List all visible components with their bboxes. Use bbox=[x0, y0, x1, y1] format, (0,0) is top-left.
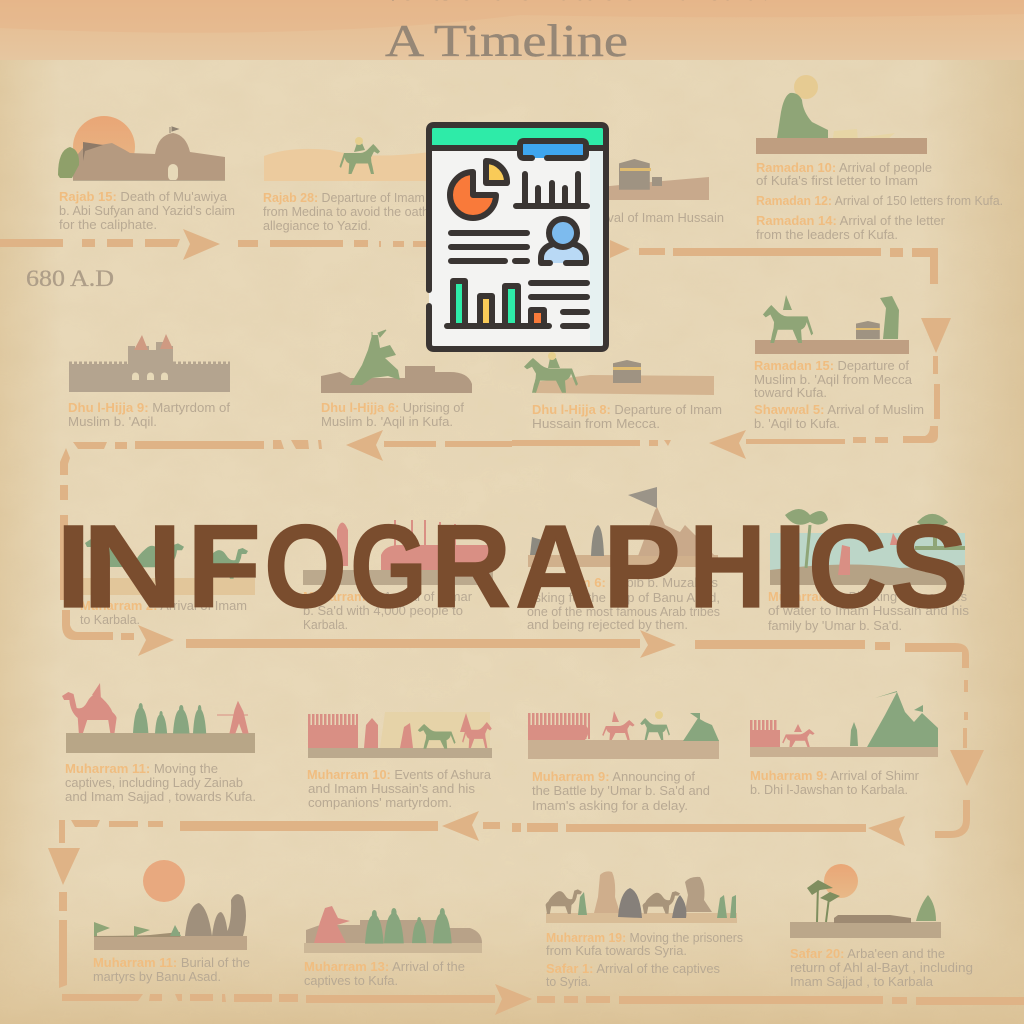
scene: Muharram 6 bbox=[528, 487, 718, 567]
text: Safar 20: Imam Sajjad , to Karbala bbox=[790, 975, 933, 989]
main heading: N bbox=[82, 501, 183, 633]
scene: Muharram 9 Shimr bbox=[750, 691, 938, 757]
scene: Mecca arrival bbox=[600, 159, 709, 200]
scene: Dhu l-Hijja 9 bbox=[69, 334, 230, 392]
scene: Ramadan 10 bbox=[756, 75, 927, 154]
text: Muharram 7: family by 'Umar b. Sa'd. bbox=[768, 619, 902, 633]
text: Dhu l-Hijja 6: Dhu l-Hijja 6: Uprising of bbox=[321, 401, 465, 415]
main heading: I bbox=[773, 501, 807, 633]
text: Dhu l-Hijja 8: Dhu l-Hijja 8: Departure of Imam bbox=[532, 403, 722, 417]
text: Ramadan 15: Muslim b. 'Aqil from Mecca bbox=[754, 373, 912, 387]
text: Rajab 15: b. Abi Sufyan and Yazid's claim bbox=[59, 204, 235, 218]
text: Dhu l-Hijja 9: Muslim b. 'Aqil. bbox=[68, 415, 157, 429]
text: Rajab 28: Rajab 28: Departure of Imam Hussain bbox=[263, 191, 473, 205]
text: Muharram 10: and Imam Hussain's and his bbox=[308, 782, 475, 796]
main heading: G bbox=[350, 501, 427, 633]
icon part: text lines left bbox=[451, 233, 527, 261]
text: Rajab 28: from Medina to avoid the oath of bbox=[263, 205, 444, 219]
scene: Muharram 7 bbox=[770, 509, 965, 585]
main heading: O bbox=[264, 501, 347, 633]
text: Muharram 2: to Karbala. bbox=[80, 613, 140, 627]
text: Ramadan 10: Ramadan 12: Arrival of 150 letters from Kufa. bbox=[756, 194, 1003, 208]
scene: Rajab 28 bbox=[264, 137, 430, 181]
text: Ramadan 15: Shawwal 5: Arrival of Muslim bbox=[754, 403, 924, 417]
text: Dhu l-Hijja 6 bbox=[321, 401, 465, 429]
text: Safar 20: return of Ahl al-Bayt , including bbox=[790, 961, 973, 975]
main heading: R bbox=[431, 501, 511, 633]
text: Ramadan 10: Ramadan 10: Arrival of people bbox=[756, 161, 932, 175]
scene: Muharram 19 bbox=[546, 871, 737, 923]
scene: Muharram 10 bbox=[308, 712, 492, 758]
text: Muharram 19: Safar 1: Arrival of the captives bbox=[546, 962, 720, 976]
text: Rajab 28 bbox=[263, 191, 473, 233]
text: Muharram 3 bbox=[303, 590, 472, 632]
scene: Muharram 11 captives bbox=[62, 683, 255, 753]
text: Dhu l-Hijja 8 bbox=[532, 403, 722, 431]
scene: Muharram 2 bbox=[80, 539, 255, 595]
text: Muharram 11 captives: Muharram 11: Moving the bbox=[65, 762, 218, 776]
text: Muharram 13 bbox=[304, 960, 465, 988]
text: Mecca arrival: Sha'ban 3: Arrival of Imam Hussain bbox=[520, 211, 724, 225]
text: Muharram 7: Muharram 7: Blocking the sources bbox=[768, 590, 967, 604]
text: Ramadan 10: of Kufa's first letter to Imam bbox=[756, 174, 918, 188]
text: Ramadan 15: Ramadan 15: Departure of bbox=[754, 359, 910, 373]
text: Rajab 15 bbox=[59, 190, 235, 232]
text: Muharram 6: one of the most famous Arab tribes bbox=[527, 605, 720, 619]
icon part: sheet outline bbox=[429, 125, 606, 349]
text: Muharram 9 Shimr bbox=[750, 769, 919, 797]
scene: Dhu l-Hijja 8 bbox=[524, 352, 714, 395]
year label: 680 A.D bbox=[26, 266, 114, 291]
text: Muharram 19: to Syria. bbox=[546, 975, 591, 989]
text: Muharram 10: companions' martyrdom. bbox=[308, 796, 452, 810]
text: Muharram 7: of water to Imam Hussain and his bbox=[768, 604, 969, 618]
text: Ramadan 15: b. 'Aqil to Kufa. bbox=[754, 417, 840, 431]
text: Muharram 9 announcing: Imam's asking for a delay. bbox=[532, 799, 688, 813]
main heading: C bbox=[808, 501, 887, 633]
text: Muharram 6: Muharram 6: Habib b. Muzahir's bbox=[527, 576, 718, 590]
scene: Muharram 11 burial bbox=[94, 860, 247, 950]
text: Safar 20: Safar 20: Arba'een and the bbox=[790, 947, 945, 961]
text: Muharram 9 Shimr: Muharram 9: Arrival of Shimr bbox=[750, 769, 919, 783]
text: Muharram 10: Muharram 10: Events of Ashura bbox=[307, 768, 491, 782]
text: Muharram 19 bbox=[546, 931, 743, 989]
title bbox=[366, 0, 770, 66]
main heading: F bbox=[187, 501, 261, 633]
text: Muharram 11 captives bbox=[65, 762, 256, 804]
text: Ramadan 10 bbox=[756, 161, 1003, 242]
icon part: blue tab bbox=[520, 141, 586, 158]
text: Muharram 6: asking for the help of Banu Asad, bbox=[527, 591, 720, 605]
text: Muharram 9 announcing: Muharram 9: Announcing of bbox=[532, 770, 696, 784]
text: Ramadan 10: from the leaders of Kufa. bbox=[756, 228, 898, 242]
main heading: A bbox=[515, 501, 596, 633]
text: Muharram 6: and being rejected by them. bbox=[527, 618, 688, 632]
text: Muharram 11 captives: captives, including Lady Zainab bbox=[65, 776, 243, 790]
title: A Timeline bbox=[385, 15, 628, 66]
text: Muharram 13: captives to Kufa. bbox=[304, 974, 398, 988]
text: Muharram 13: Muharram 13: Arrival of the bbox=[304, 960, 465, 974]
main heading: P bbox=[603, 501, 681, 633]
top torn band bbox=[0, 0, 1024, 60]
text: Muharram 7 bbox=[768, 590, 969, 633]
scene: Muharram 3 bbox=[303, 520, 493, 585]
icon part: text lines right bbox=[531, 283, 587, 326]
icon part: top bar chart bbox=[516, 174, 587, 206]
main heading bbox=[56, 501, 968, 633]
text: Muharram 10 bbox=[307, 768, 491, 810]
icon part: bottom bar chart bbox=[447, 281, 549, 326]
scene: Ramadan 15 bbox=[755, 295, 909, 354]
icon part: person bbox=[541, 219, 586, 263]
text: Ramadan 10: Ramadan 14: Arrival of the letter bbox=[756, 214, 945, 228]
text: Muharram 11 burial: Muharram 11: Burial of the bbox=[93, 956, 250, 970]
main heading: I bbox=[56, 501, 91, 633]
text: Rajab 15: for the caliphate. bbox=[59, 218, 157, 232]
text: Muharram 3: Karbala. bbox=[303, 618, 348, 632]
text: Muharram 3: b. Sa'd with 4,000 people to bbox=[303, 604, 463, 618]
main heading: H bbox=[689, 501, 766, 633]
text: Muharram 9 Shimr: b. Dhi l-Jawshan to Karbala. bbox=[750, 783, 908, 797]
scene: Rajab 15 bbox=[58, 116, 225, 181]
text: Dhu l-Hijja 8: Hussain from Mecca. bbox=[532, 417, 660, 431]
text: Muharram 19: Muharram 19: Moving the prisoners bbox=[546, 931, 743, 945]
scene: Safar 20 bbox=[790, 864, 941, 938]
text: Muharram 2 bbox=[80, 599, 247, 627]
scene: Dhu l-Hijja 6 bbox=[321, 330, 472, 393]
text: Muharram 11 burial: martyrs by Banu Asad. bbox=[93, 970, 221, 984]
text: Rajab 28: allegiance to Yazid. bbox=[263, 219, 371, 233]
text: Ramadan 15 bbox=[754, 359, 924, 431]
timeline path with arrows bbox=[0, 229, 1024, 1015]
text: Dhu l-Hijja 9 bbox=[68, 401, 231, 429]
text: Muharram 6 bbox=[527, 576, 720, 632]
text: Dhu l-Hijja 6: Muslim b. 'Aqil in Kufa. bbox=[321, 415, 453, 429]
text: Safar 20 bbox=[790, 947, 973, 989]
text: Muharram 2: Muharram 2: Arrival of Imam bbox=[80, 599, 247, 613]
scene: Muharram 9 announcing bbox=[528, 711, 719, 759]
text: Dhu l-Hijja 9: Dhu l-Hijja 9: Martyrdom of bbox=[68, 401, 231, 415]
text: Muharram 9 announcing bbox=[532, 770, 710, 813]
icon part: pie chart bbox=[450, 161, 507, 218]
main heading: S bbox=[890, 501, 968, 633]
icon: infographic report sheet bbox=[429, 125, 606, 349]
text: Rajab 15: Rajab 15: Death of Mu'awiya bbox=[59, 190, 227, 204]
text: Muharram 11 burial bbox=[93, 956, 250, 984]
text: Muharram 9 announcing: the Battle by 'Umar b. Sa'd and bbox=[532, 784, 710, 798]
text: Ramadan 15: toward Kufa. bbox=[754, 386, 827, 400]
text: Muharram 11 captives: and Imam Sajjad , towards Kufa. bbox=[65, 790, 256, 804]
text: Muharram 3: Muharram 3: Arrival of 'Umar bbox=[303, 590, 472, 604]
text: Muharram 19: from Kufa towards Syria. bbox=[546, 944, 687, 958]
scene: Muharram 13 bbox=[304, 906, 482, 953]
